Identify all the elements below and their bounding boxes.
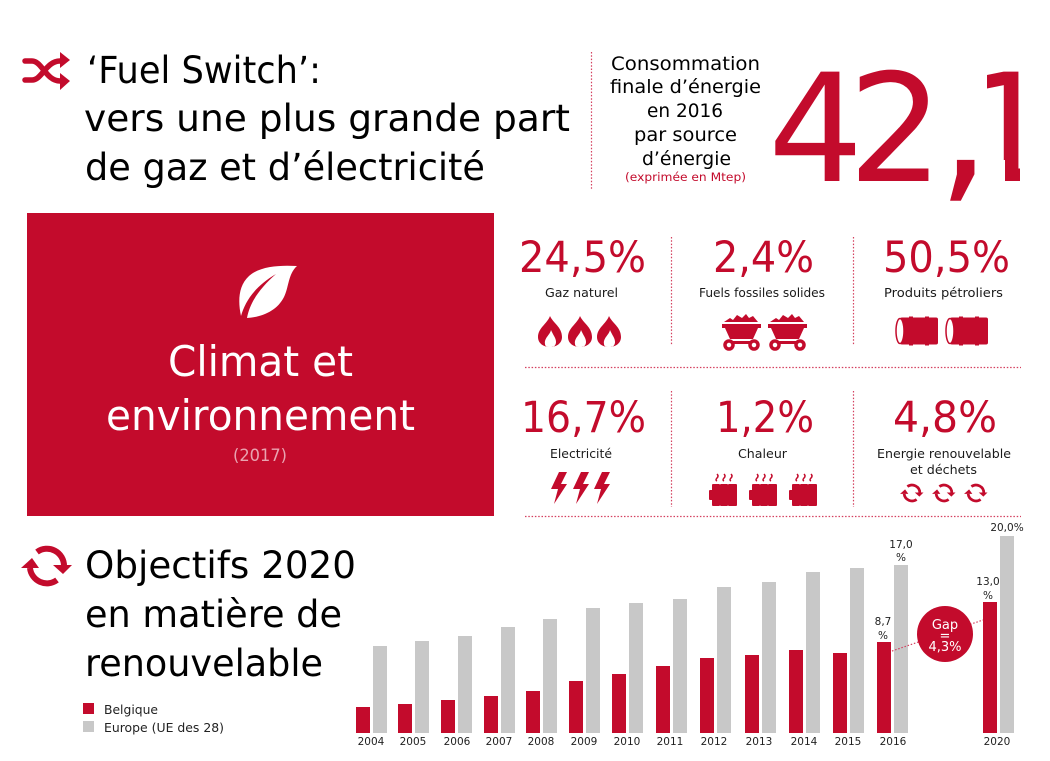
bar chart: renouvelable 2004-2020: 2020	[984, 736, 1010, 748]
stat: fuels fossiles solides: 2,4%	[713, 233, 814, 283]
callout: gap: 4,3%	[928, 640, 962, 655]
panel heading: environnement	[106, 391, 415, 440]
stat: fuels fossiles solides: Fuels fossiles solides	[699, 286, 825, 300]
text block: consommation finale	[610, 53, 761, 184]
stat: electricite	[521, 393, 646, 504]
stat: electricite: Electricité	[550, 447, 612, 461]
big number: 42,1: ,	[937, 24, 991, 222]
bar chart: renouvelable 2004-2020: 2007	[486, 736, 512, 748]
stat: chaleur	[709, 393, 817, 506]
stat: electricite: 16,7%	[521, 393, 646, 443]
big number: 42,1: 4	[768, 43, 863, 217]
bar chart: renouvelable 2004-2020: 2016	[880, 736, 907, 748]
bar chart: renouvelable 2004-2020: 13,0	[976, 576, 1000, 588]
stat: chaleur: 1,2%	[716, 393, 814, 443]
stat: chaleur: Chaleur	[738, 447, 787, 461]
bar chart: renouvelable 2004-2020: 2008	[528, 736, 554, 748]
stat: energie renouvelable	[877, 393, 1011, 501]
bar chart: renouvelable 2004-2020: %	[878, 630, 888, 642]
bar chart: renouvelable 2004-2020: 8,7	[875, 616, 891, 628]
stat: produits petroliers: Produits pétroliers	[884, 286, 1003, 300]
text block: consommation finale: Consommation	[611, 53, 760, 75]
stat: energie renouvelable: 4,8%	[893, 393, 997, 443]
icon: renewable cycle	[21, 549, 72, 583]
heading: objectifs 2020: Objectifs 2020	[85, 543, 356, 587]
bar chart: renouvelable 2004-2020: %	[983, 590, 993, 602]
stat: fuels fossiles solides	[699, 233, 825, 349]
bar chart: renouvelable 2004-2020: 2012	[701, 736, 727, 748]
callout: gap: Gap	[932, 618, 958, 633]
icon: leaf	[239, 266, 297, 318]
text block: consommation finale: par source	[634, 124, 737, 146]
stat: energie renouvelable: et déchets	[910, 463, 977, 477]
bar chart: renouvelable 2004-2020: 2006	[444, 736, 471, 748]
text block: consommation finale: finale d’énergie	[610, 76, 761, 98]
bar chart: renouvelable 2004-2020: 2015	[835, 736, 861, 748]
bar chart: renouvelable 2004-2020: 2013	[746, 736, 772, 748]
text block: consommation finale: en 2016	[647, 100, 723, 122]
stat: energie renouvelable: Energie renouvelable	[877, 447, 1011, 461]
bar chart: renouvelable 2004-2020: 2011	[657, 736, 683, 748]
big number: 42,1: 2	[848, 43, 943, 217]
title: Fuel Switch: ‘Fuel Switch’:	[87, 48, 321, 92]
stat: gaz naturel	[519, 233, 646, 347]
bar chart: renouvelable 2004-2020: 2004	[358, 736, 385, 748]
title: Fuel Switch: de gaz et d’électricité	[85, 145, 485, 189]
text block: consommation finale: d’énergie	[642, 148, 731, 170]
stat: gaz naturel: Gaz naturel	[545, 286, 618, 300]
bar chart: renouvelable 2004-2020: 20,0%	[990, 522, 1024, 534]
panel heading	[106, 337, 415, 440]
panel year: (2017)	[233, 446, 287, 466]
title: Fuel Switch	[84, 48, 570, 189]
legend	[83, 703, 224, 735]
bar chart: renouvelable 2004-2020: 2005	[400, 736, 426, 748]
divider: header	[590, 52, 592, 190]
panel heading: Climat et	[168, 337, 353, 386]
icon: shuffle arrows	[25, 52, 70, 90]
heading: objectifs 2020: en matière de	[85, 592, 342, 636]
title: Fuel Switch: vers une plus grande part	[84, 96, 570, 140]
big number: 42,1	[775, 70, 1020, 201]
stat: produits petroliers: 50,5%	[883, 233, 1010, 283]
callout: gap	[892, 606, 983, 662]
heading: objectifs 2020: renouvelable	[85, 641, 323, 685]
bar chart: renouvelable 2004-2020: 2014	[791, 736, 818, 748]
panel: climat et environnement	[27, 213, 494, 516]
legend: Europe (UE des 28)	[104, 721, 224, 735]
stat: produits petroliers	[883, 233, 1010, 346]
bar chart: renouvelable 2004-2020: 2010	[614, 736, 640, 748]
bar chart: renouvelable 2004-2020: 2009	[571, 736, 597, 748]
heading: objectifs 2020	[85, 543, 356, 685]
callout: gap: =	[940, 629, 950, 644]
bar chart: renouvelable 2004-2020: %	[896, 552, 906, 564]
stat: gaz naturel: 24,5%	[519, 233, 646, 283]
legend: Belgique	[104, 703, 158, 717]
bar chart: renouvelable 2004-2020: 17,0	[889, 539, 913, 551]
bar chart: renouvelable 2004-2020	[356, 522, 1024, 748]
text block: consommation finale: (exprimée en Mtep)	[625, 170, 746, 184]
